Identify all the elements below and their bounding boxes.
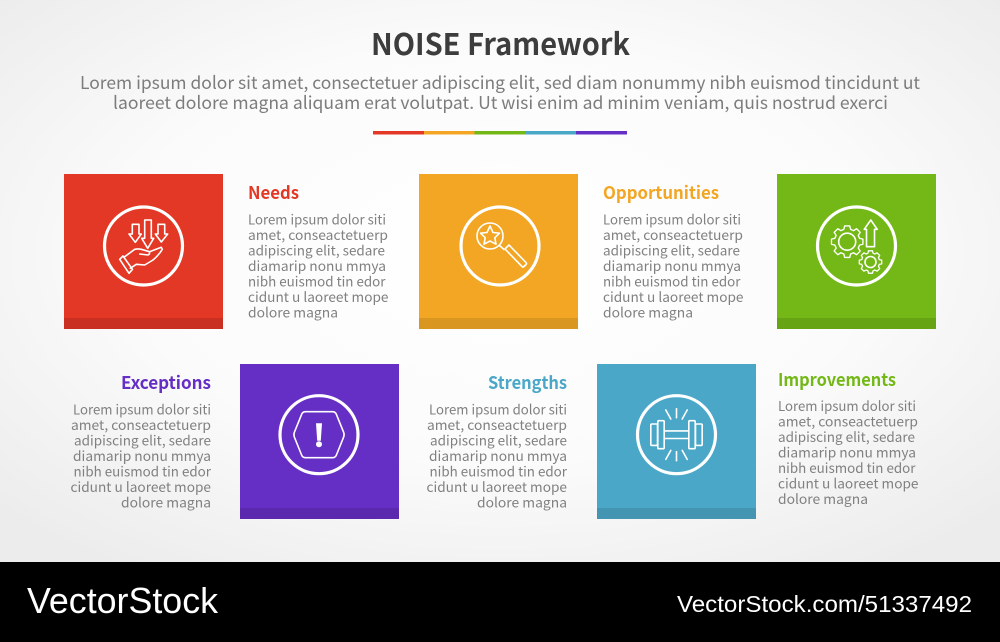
text block: exceptions: adipiscing elit, sedare xyxy=(74,430,211,450)
text block: strengths: Strengths xyxy=(488,370,567,395)
text block: exceptions: Lorem ipsum dolor siti xyxy=(73,398,211,418)
panel: improvements card xyxy=(777,174,936,329)
footer logo: VectorStock xyxy=(27,580,219,621)
subtitle text: laoreet dolore magna aliquam erat volutpat. Ut wisi enim ad minim veniam, quis nostrud exerci xyxy=(113,90,888,115)
footer bar xyxy=(0,562,1000,642)
text block: opportunities: dolore magna xyxy=(603,302,693,322)
icon: magnifier with star xyxy=(461,207,539,285)
subtitle text xyxy=(80,70,920,115)
text block: strengths: diamarip nonu mmya xyxy=(429,445,567,465)
text block: improvements xyxy=(778,367,918,508)
text block: needs: Needs xyxy=(248,180,299,205)
panel: opportunities card xyxy=(419,174,578,329)
icon: hand with down arrows xyxy=(104,207,182,285)
subtitle text: Lorem ipsum dolor sit amet, consectetuer adipiscing elit, sed diam nonummy nibh euismod tincidunt ut xyxy=(80,70,920,95)
text block: needs: amet, conseactetuerp xyxy=(248,224,388,244)
text block: strengths: cidunt u laoreet mope xyxy=(426,476,567,496)
panel: strengths card xyxy=(597,364,756,519)
text block: strengths xyxy=(426,370,568,512)
text block: needs: Lorem ipsum dolor siti xyxy=(248,208,386,228)
text block: improvements: Improvements xyxy=(778,367,896,392)
icon: dumbbell xyxy=(638,396,716,474)
text block: opportunities: cidunt u laoreet mope xyxy=(603,286,744,306)
text block: strengths: adipiscing elit, sedare xyxy=(430,430,567,450)
icon: gears with up arrow xyxy=(818,207,896,285)
text block: improvements: adipiscing elit, sedare xyxy=(778,426,915,446)
icon: hexagon warning xyxy=(280,396,358,474)
title: NOISE Framework xyxy=(371,20,630,64)
text block: needs: cidunt u laoreet mope xyxy=(248,286,388,306)
footer image id: VectorStock.com/51337492 xyxy=(677,591,972,617)
text block: strengths: amet, conseactetuerp xyxy=(427,414,567,434)
text block: exceptions: Exceptions xyxy=(121,370,211,395)
text block: needs xyxy=(248,180,388,322)
panel: exceptions card xyxy=(240,364,399,519)
text block: exceptions xyxy=(70,370,212,512)
text block: needs: dolore magna xyxy=(248,302,338,322)
text block: needs: adipiscing elit, sedare xyxy=(248,240,385,260)
text block: needs: nibh euismod tin edor xyxy=(248,270,386,290)
text block: improvements: dolore magna xyxy=(778,488,868,508)
text block: exceptions: dolore magna xyxy=(121,492,211,512)
text block: needs: diamarip nonu mmya xyxy=(248,255,386,275)
text block: strengths: dolore magna xyxy=(477,492,567,512)
text block: opportunities: diamarip nonu mmya xyxy=(603,255,741,275)
text block: opportunities: nibh euismod tin edor xyxy=(603,270,741,290)
text block: improvements: cidunt u laoreet mope xyxy=(778,472,918,492)
text block: improvements: amet, conseactetuerp xyxy=(778,410,918,430)
text block: opportunities: adipiscing elit, sedare xyxy=(603,240,740,260)
text block: improvements: diamarip nonu mmya xyxy=(778,442,916,462)
text block: opportunities: Opportunities xyxy=(603,180,719,205)
text block: exceptions: amet, conseactetuerp xyxy=(71,414,211,434)
text block: opportunities: amet, conseactetuerp xyxy=(603,224,743,244)
text block: exceptions: diamarip nonu mmya xyxy=(73,445,211,465)
text block: improvements: Lorem ipsum dolor siti xyxy=(778,395,916,415)
text block: exceptions: cidunt u laoreet mope xyxy=(70,476,211,496)
colour divider bar xyxy=(373,131,627,134)
text block: strengths: nibh euismod tin edor xyxy=(430,460,568,480)
text block: improvements: nibh euismod tin edor xyxy=(778,457,916,477)
text block: opportunities xyxy=(603,180,744,322)
text block: exceptions: nibh euismod tin edor xyxy=(74,460,212,480)
panel: needs card xyxy=(64,174,223,329)
text block: opportunities: Lorem ipsum dolor siti xyxy=(603,208,741,228)
text block: strengths: Lorem ipsum dolor siti xyxy=(429,398,567,418)
